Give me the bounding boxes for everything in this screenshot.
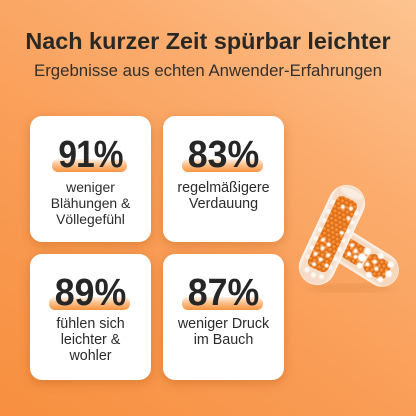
capsule shadow bbox=[306, 284, 394, 292]
white beads in core bbox=[308, 200, 356, 272]
highlight bar bbox=[182, 159, 263, 172]
label: weniger Druck im Bauch: weniger Druck bbox=[178, 316, 269, 332]
stat: 87%: 87% bbox=[188, 272, 259, 314]
stat: 91%: 91% bbox=[58, 134, 123, 176]
subtitle: Ergebnisse aus echten Anwender-Erfahrungen bbox=[34, 61, 382, 80]
title: Nach kurzer Zeit spürbar leichter bbox=[25, 28, 391, 54]
label: regelmäßigere Verdauung bbox=[177, 180, 270, 212]
label: weniger Blähungen & Völlegefühl: weniger bbox=[66, 179, 115, 195]
label: weniger Blähungen & Völlegefühl bbox=[51, 179, 130, 227]
label: fühlen sich leichter & wohler bbox=[56, 316, 125, 364]
label: fühlen sich leichter & wohler: fühlen sich bbox=[56, 316, 125, 332]
capsule: lying bbox=[321, 223, 405, 293]
highlight bar bbox=[182, 297, 263, 310]
label: weniger Druck im Bauch bbox=[178, 316, 270, 348]
label: fühlen sich leichter & wohler: leichter & bbox=[61, 332, 120, 348]
pale beads bbox=[298, 199, 360, 284]
panel: 89 percent bbox=[30, 254, 151, 380]
highlight bar bbox=[49, 297, 130, 310]
orange bead core bbox=[306, 194, 359, 274]
stat: 89%: 89% bbox=[55, 272, 126, 314]
label: weniger Blähungen & Völlegefühl: Blähungen & bbox=[51, 195, 130, 211]
panel: 91 percent bbox=[30, 116, 151, 242]
label: regelmäßigere Verdauung: Verdauung bbox=[189, 196, 258, 212]
label: fühlen sich leichter & wohler: wohler bbox=[69, 348, 112, 364]
capsule: leaning bbox=[293, 179, 371, 291]
glass body bbox=[293, 179, 371, 291]
panel: 83 percent bbox=[163, 116, 284, 242]
panel: 87 percent bbox=[163, 254, 284, 380]
glass top cap bbox=[339, 185, 364, 202]
stat: 83%: 83% bbox=[188, 134, 259, 176]
icon: two capsules with orange and white beads bbox=[298, 184, 399, 292]
label: weniger Blähungen & Völlegefühl: Völlegefühl bbox=[56, 211, 125, 227]
label: weniger Druck im Bauch: im Bauch bbox=[194, 332, 253, 348]
highlight bar bbox=[52, 159, 127, 172]
label: regelmäßigere Verdauung: regelmäßigere bbox=[177, 180, 270, 196]
